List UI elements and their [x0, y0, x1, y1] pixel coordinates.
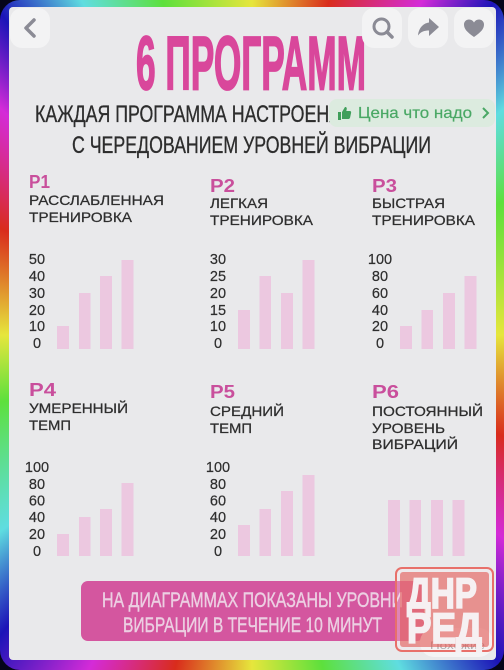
- P3 axis: 60: [372, 286, 388, 302]
- P3 description: [372, 195, 476, 228]
- watermark logo: [396, 568, 493, 653]
- P4 description: ТЕМП: [29, 417, 71, 433]
- P3 description: ТРЕНИРОВКА: [372, 212, 476, 228]
- P5 axis: [206, 460, 230, 560]
- P3 axis: 20: [372, 319, 388, 335]
- P6 bars: [388, 500, 464, 556]
- P2 bars: [238, 260, 314, 349]
- P5 axis: 100: [206, 460, 230, 476]
- P4 axis: 100: [25, 460, 49, 476]
- P3 heading: P3: [372, 176, 397, 196]
- P2 axis: 20: [210, 286, 226, 302]
- P3 description: БЫСТРАЯ: [372, 195, 445, 211]
- P6 heading: P6: [372, 382, 399, 402]
- watermark logo: РЕД: [407, 605, 482, 653]
- P4 axis: 0: [33, 544, 41, 560]
- P1 axis: 30: [29, 286, 45, 302]
- P1 heading: P1: [29, 172, 50, 192]
- P1 axis: 50: [29, 252, 45, 268]
- callout banner: НА ДИАГРАММАХ ПОКАЗАНЫ УРОВНИ: [102, 589, 403, 612]
- P4 bars: [57, 483, 134, 556]
- P5 axis: 40: [210, 510, 226, 526]
- panel: P1: [29, 172, 164, 352]
- panel: P4: [25, 380, 134, 560]
- P2 axis: 0: [214, 336, 222, 352]
- P4 axis: 40: [29, 510, 45, 526]
- back button: [10, 8, 50, 48]
- price badge: [329, 99, 495, 127]
- P3 axis: 40: [372, 303, 388, 319]
- P4 heading: P4: [29, 380, 56, 400]
- P5 bars: [238, 475, 314, 556]
- P1 axis: 40: [29, 269, 45, 285]
- P3 axis: 100: [368, 252, 392, 268]
- P5 description: ТЕМП: [210, 420, 252, 436]
- P1 description: [29, 192, 164, 225]
- P2 axis: 15: [210, 303, 226, 319]
- subtitle: КАЖДАЯ ПРОГРАММА НАСТРОЕНА: [35, 101, 341, 128]
- P6 description: [372, 402, 483, 452]
- P5 axis: 0: [214, 544, 222, 560]
- P5 axis: 60: [210, 494, 226, 510]
- P5 axis: 80: [210, 477, 226, 493]
- P1 axis: [29, 252, 45, 352]
- P2 axis: 30: [210, 252, 226, 268]
- P1 axis: 10: [29, 319, 45, 335]
- P2 axis: [210, 252, 226, 352]
- P6 description: УРОВЕНЬ: [372, 420, 445, 436]
- P4 description: УМЕРЕННЫЙ: [29, 399, 128, 416]
- P4 axis: 20: [29, 527, 45, 543]
- P2 description: ЛЕГКАЯ: [210, 195, 268, 211]
- P1 description: ТРЕНИРОВКА: [29, 209, 133, 225]
- heart button: [454, 8, 494, 48]
- callout banner: ВИБРАЦИИ В ТЕЧЕНИЕ 10 МИНУТ: [123, 614, 382, 637]
- share button: [408, 8, 448, 48]
- watermark logo: ДНР: [407, 570, 477, 618]
- P1 axis: 0: [33, 336, 41, 352]
- P1 bars: [57, 260, 134, 349]
- P2 axis: 25: [210, 269, 226, 285]
- similar button: Похожие: [430, 640, 485, 652]
- P4 axis: 60: [29, 494, 45, 510]
- panel: P2: [210, 176, 314, 352]
- P2 axis: 10: [210, 319, 226, 335]
- P3 axis: 0: [376, 336, 384, 352]
- P5 heading: P5: [210, 382, 235, 402]
- panel: P3: [368, 176, 476, 352]
- P5 description: СРЕДНИЙ: [210, 402, 284, 419]
- P3 axis: 80: [372, 269, 388, 285]
- P4 axis: [25, 460, 49, 560]
- P4 axis: 80: [29, 477, 45, 493]
- P1 description: РАССЛАБЛЕННАЯ: [29, 192, 164, 208]
- price badge: Цена что надо: [358, 105, 472, 122]
- similar button: [420, 628, 493, 657]
- panel: P5: [206, 382, 314, 560]
- P5 axis: 20: [210, 527, 226, 543]
- subtitle: [35, 101, 431, 159]
- P3 bars: [400, 276, 476, 349]
- panel: P6: [372, 382, 483, 556]
- P2 description: [210, 195, 314, 228]
- P3 axis: [368, 252, 392, 352]
- search button: [362, 8, 402, 48]
- P5 description: [210, 402, 284, 436]
- P2 heading: P2: [210, 176, 235, 196]
- P6 description: ПОСТОЯННЫЙ: [372, 402, 483, 419]
- P4 description: [29, 399, 128, 433]
- P2 description: ТРЕНИРОВКА: [210, 212, 314, 228]
- P1 axis: 20: [29, 303, 45, 319]
- callout banner: [81, 581, 424, 641]
- P6 description: ВИБРАЦИЙ: [372, 435, 458, 452]
